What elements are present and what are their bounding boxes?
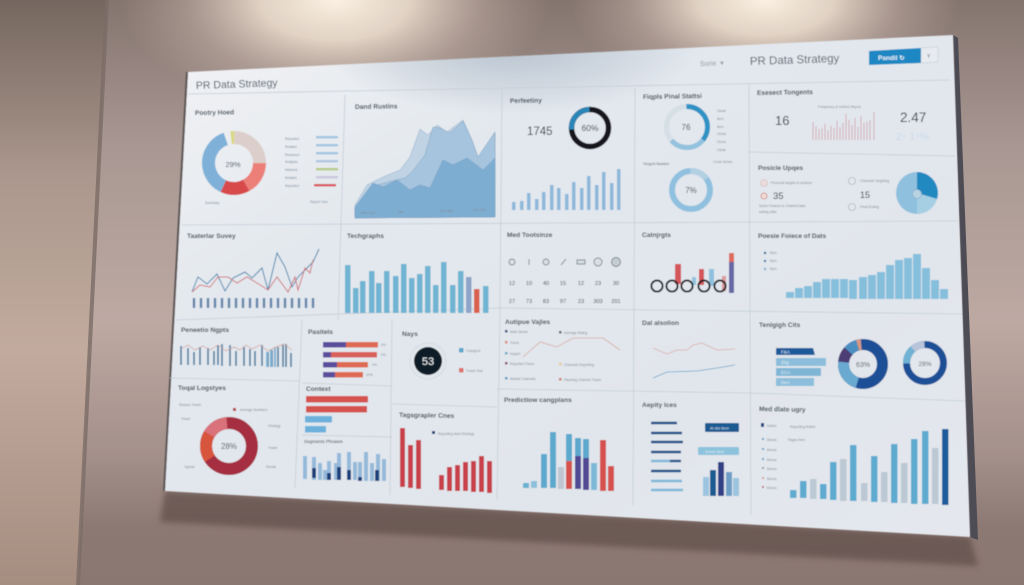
panel: total logistics: [178, 385, 281, 469]
panel: essential insights: Frequency of metrics Report: [818, 105, 861, 109]
legend: Bonus: [767, 458, 777, 462]
heading: Tagsgrapler Cnes: [399, 412, 455, 420]
arc line: [181, 344, 292, 351]
legend top: Usual: [717, 109, 726, 113]
labels: Rental: [266, 465, 276, 469]
button primary: [869, 48, 921, 65]
thin bars: [181, 344, 291, 367]
donut right value: 28%: [918, 361, 932, 368]
number rows: 12: [578, 281, 584, 287]
legend top: [717, 109, 726, 152]
panel: products: 20%: [366, 373, 373, 377]
panel: topographic cases: Reporting Next Strategy: [438, 432, 474, 436]
number rows: 15: [560, 281, 566, 287]
panel: donut legend: [195, 109, 338, 205]
button dark: Al did Item: [710, 426, 730, 430]
heading: Peneetio Ngpts: [181, 327, 229, 334]
line chart: [192, 249, 319, 292]
panel: active values: [505, 319, 620, 382]
bar chart: [786, 254, 948, 299]
icon: [848, 178, 856, 184]
panel: area chart: [355, 103, 495, 218]
donut value: 29%: [225, 160, 241, 169]
panel: forecast of data: [758, 233, 948, 299]
heading: Predictiow cangplans: [504, 397, 572, 404]
heading: Dal alsolion: [642, 320, 679, 327]
metric large: 2.47: [900, 110, 926, 125]
mini bars: [194, 298, 313, 308]
panel: categories: [642, 232, 734, 293]
legend: Analysis: [285, 160, 298, 164]
button secondary: Y: [927, 54, 931, 60]
gauge value: 53: [422, 356, 434, 368]
legend: Bonus: [767, 448, 777, 452]
heading: Poesie Foiece of Dats: [758, 233, 826, 240]
labels: Travel: [268, 446, 278, 450]
number rows: 10: [526, 281, 532, 287]
metric: 35: [773, 191, 784, 202]
bars: DeA: [781, 380, 790, 385]
number rows: 12: [509, 281, 515, 287]
bar chart: [523, 432, 614, 491]
legend text: [505, 330, 601, 382]
legend: Pages Item: [788, 438, 805, 442]
donut bottom value: 7%: [685, 186, 697, 195]
bar chart: [790, 429, 948, 505]
heading: Catnjrgts: [642, 232, 671, 239]
panel: possible updates: [758, 165, 938, 214]
legend text: Main Series: [510, 330, 528, 334]
bars: [305, 396, 368, 432]
bars: F&A: [781, 350, 790, 354]
ring row: [651, 280, 726, 292]
heading: Tenlgigh Cits: [759, 322, 801, 329]
panel: possible updates: saving data: [759, 210, 776, 214]
panel: context: [305, 386, 368, 432]
ring gauge: [572, 110, 608, 146]
heading: Med dlate ugry: [759, 406, 806, 414]
heading: Pasitels: [308, 329, 333, 336]
legend text: Trend: [510, 341, 519, 345]
header right controls: [700, 47, 938, 68]
legend: [459, 348, 484, 373]
legend: Related: [285, 176, 297, 180]
panel: essential insights: [757, 89, 929, 143]
panel: personal nights: [181, 327, 292, 367]
legend: Item: [770, 259, 777, 263]
board shadow: [160, 491, 978, 566]
number rows: 40: [543, 281, 549, 287]
number rows: 30: [613, 281, 619, 287]
legend: Bonus: [767, 438, 777, 442]
legend: Transport: [466, 349, 480, 353]
number rows: [509, 281, 621, 305]
labels: [179, 403, 281, 469]
heading: Med Tootsinze: [507, 232, 553, 239]
panel: prediction campaigns: [504, 397, 614, 491]
panel: products: 0%: [372, 363, 377, 367]
number rows: 201: [611, 299, 621, 305]
bars: [323, 342, 378, 378]
legend: Related: [285, 145, 297, 149]
heading: Aepity Ices: [642, 402, 677, 409]
donut right: [906, 344, 944, 382]
labels: Strategy: [268, 424, 281, 428]
legend text: Planning Channel Travel: [564, 378, 601, 382]
bars: Zhg: [781, 360, 789, 365]
legend: Bonus: [767, 477, 777, 481]
icon row: [509, 258, 620, 266]
button secondary: [921, 47, 938, 63]
panel: analytic lines: [642, 402, 739, 496]
select label: Sorie ▾: [700, 60, 724, 68]
number rows: 23: [595, 281, 601, 287]
pie chart: [896, 172, 938, 214]
labels: Reason Travel: [179, 403, 201, 407]
heading: Autipue Vajles: [505, 319, 550, 326]
donut chart: [204, 133, 264, 193]
board edge: [953, 35, 978, 540]
legend text: Reported Travel: [510, 362, 534, 366]
legend: Bonus: [767, 467, 777, 471]
heading: Fiqpls Pinal Stattsi: [643, 93, 702, 101]
horizontal bars: [651, 423, 683, 490]
bar chart: [303, 452, 386, 481]
donut left: [844, 344, 882, 384]
panel: possible updates: Final Ending: [860, 205, 879, 209]
legend: Network: [285, 168, 298, 172]
legend text: Impact: [510, 352, 520, 356]
panel: tenograph charts: [759, 322, 944, 386]
donut top: [666, 106, 708, 148]
metric: 15: [860, 190, 870, 200]
panel: techgraphs: [345, 233, 488, 313]
legend: Reported: [285, 184, 299, 188]
panel: possible updates: Channels Targeting: [860, 179, 889, 183]
donut top value: 76: [682, 123, 691, 132]
heading: Taaterlar Suvey: [187, 233, 236, 240]
panel: performance: [510, 97, 620, 210]
legend: Reporting Rolled: [790, 425, 815, 429]
icon: [760, 180, 768, 186]
panel: area chart: Mon Year: [361, 211, 376, 215]
subheadings: Tangels Number: [643, 162, 670, 166]
number rows: 27: [509, 299, 515, 305]
number rows: 303: [593, 299, 603, 305]
heading: Perfeetiny: [510, 97, 542, 105]
legend: Travel Year: [466, 369, 484, 373]
icon: [848, 204, 856, 210]
legend top: Gross: [717, 140, 726, 144]
metric: 1745: [527, 126, 553, 138]
legend text: Market Channels: [510, 377, 536, 381]
panel: med toolsize: [507, 232, 621, 305]
legend: [285, 136, 338, 188]
area layers: [355, 120, 495, 218]
labels: Travel: [181, 417, 191, 421]
line chart: [653, 343, 735, 378]
bar chart: [512, 169, 620, 210]
legend text: Channels Reporting: [564, 363, 594, 367]
title left: PR Data Strategy: [196, 77, 279, 92]
panel: data motion: [642, 320, 735, 378]
gauge value: 60%: [581, 123, 599, 133]
panel: nays gauge: [402, 331, 484, 379]
legend: Bonus: [767, 486, 777, 490]
title right: PR Data Strategy: [750, 53, 840, 68]
pink micro bars: [813, 112, 874, 140]
legend top: Item: [717, 117, 724, 121]
number rows: 97: [560, 299, 566, 305]
panel: area chart: Rev Max: [440, 209, 454, 213]
panel: possible updates: Personal targets to achieve: [771, 181, 812, 185]
legend: [761, 423, 815, 490]
bars: [675, 253, 734, 293]
labels: Average Numbers: [240, 408, 268, 412]
legend text: Average Rating: [564, 331, 587, 335]
heading: Dand Rustins: [355, 103, 398, 111]
panel: donut legend: Report Year: [310, 200, 329, 204]
donut value: 28%: [221, 442, 237, 451]
button light: Some Item: [705, 449, 725, 454]
legend: [432, 431, 435, 434]
legend: Reported: [285, 137, 299, 141]
panel: med data utility: [759, 406, 948, 505]
donut chart: [206, 423, 252, 469]
panel: two donuts: [643, 93, 733, 209]
heading: Pootry Hoed: [195, 109, 234, 117]
panel: segment bars: [303, 439, 386, 481]
labels: Typical: [184, 465, 195, 469]
metric: 16: [775, 113, 789, 128]
heading: Toqal Logstyes: [178, 385, 226, 392]
panel: topographic cases: [399, 412, 492, 493]
legend top: Gross: [717, 132, 726, 136]
number rows: 83: [543, 299, 549, 305]
panel: products: 0%: [381, 353, 386, 357]
heading: Techgraphs: [347, 233, 384, 240]
panel: products: [308, 329, 386, 378]
panel: area chart: Jan: [398, 210, 404, 214]
panel: tactical survey: [187, 233, 319, 308]
panel: two donuts: Cross Series: [713, 160, 733, 164]
heading: Esesect Tongents: [757, 89, 813, 97]
legend: [764, 251, 777, 271]
icon: [761, 193, 767, 199]
donut left value: 63%: [856, 362, 870, 369]
heading: Posicle Upqes: [758, 165, 803, 172]
dark overlay bars: [312, 467, 379, 481]
faded metric: 2↑ 1↑%: [896, 132, 929, 143]
legend top: Item: [717, 125, 724, 129]
number rows: 73: [526, 299, 532, 305]
button primary: Pandil ↻: [878, 55, 905, 62]
bars: [703, 462, 739, 496]
legend: Item: [770, 267, 777, 271]
legend top: Usual: [717, 148, 726, 152]
heading: Nays: [402, 331, 418, 338]
legend: Research: [285, 153, 300, 157]
panel: products: 0%: [381, 343, 386, 347]
dashboard board: [163, 0, 970, 537]
heading: Segments Phrases: [304, 439, 344, 444]
donut bottom: [672, 171, 710, 209]
heading: Context: [306, 386, 331, 393]
legend: Notice: [767, 424, 777, 428]
bars: [776, 348, 826, 386]
panel grid lines: [170, 80, 965, 515]
panel: possible updates: Some Finance is Chained data: [759, 204, 805, 208]
number rows: 23: [578, 299, 584, 305]
legend: Item: [770, 251, 777, 255]
bar chart: [400, 428, 492, 493]
bar chart: [345, 262, 488, 313]
panel: area chart: Mar Max: [473, 208, 486, 212]
line: [523, 338, 620, 357]
panel: donut legend: Summary: [205, 201, 220, 205]
bars: ECA: [781, 370, 790, 375]
